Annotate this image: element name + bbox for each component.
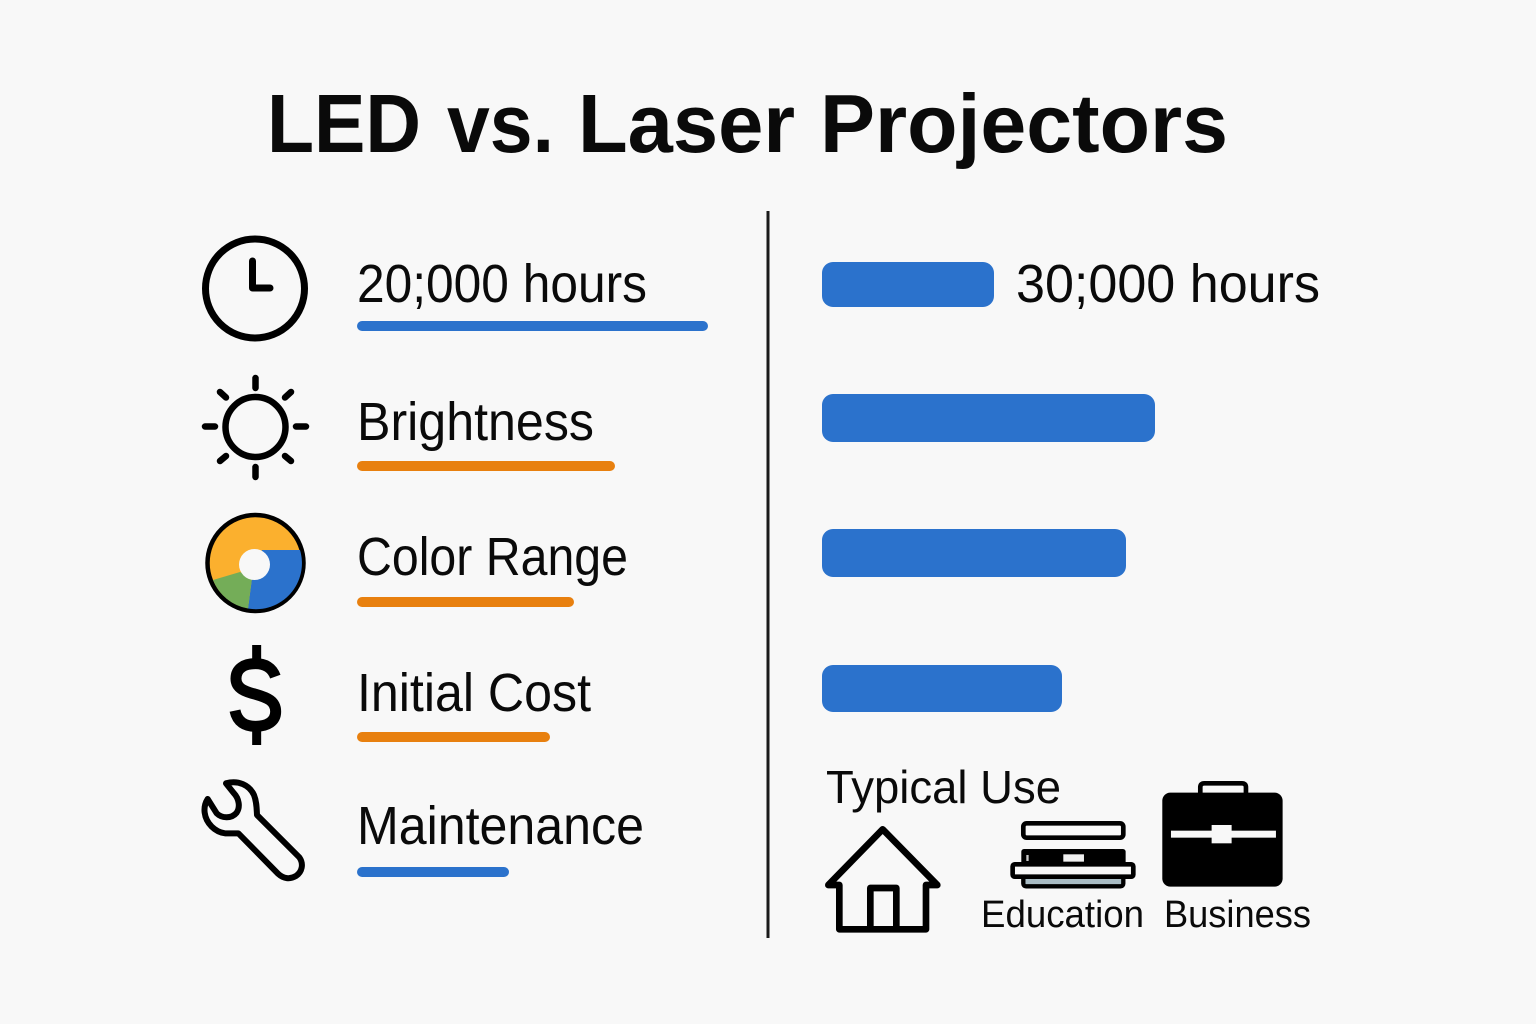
laser lifespan label: 30;000 hours (1016, 254, 1320, 314)
title: Laser (578, 77, 795, 170)
initial cost bar (357, 732, 550, 742)
icon: clock (206, 239, 304, 338)
maintenance label: Maintenance (357, 796, 644, 856)
icon: books (1013, 823, 1133, 886)
LED lifespan label: 20;000 hours (357, 254, 647, 314)
icon: sun (205, 378, 306, 477)
panel: typical use (826, 761, 1311, 936)
brightness bar (357, 461, 615, 471)
divider (766, 211, 770, 938)
laser color range bar (822, 529, 1126, 577)
icon: house (828, 829, 937, 929)
panel: laser column (822, 254, 1320, 712)
education label: Education (981, 894, 1144, 936)
icon: dollar sign (235, 645, 276, 745)
icon: wrench (204, 782, 302, 878)
initial cost label: Initial Cost (357, 663, 591, 723)
color range bar (357, 597, 574, 607)
color range label: Color Range (357, 527, 628, 587)
laser lifespan bar (822, 262, 994, 307)
title: LED (267, 77, 421, 170)
title: vs. (447, 77, 554, 170)
brightness label: Brightness (357, 392, 594, 452)
business label: Business (1164, 894, 1311, 936)
title: Projectors (820, 77, 1228, 170)
LED lifespan bar (357, 321, 708, 331)
panel: LED column (204, 239, 708, 878)
icon: color wheel (208, 515, 304, 611)
maintenance bar (357, 867, 509, 877)
laser initial cost bar (822, 665, 1062, 712)
icon: briefcase (1162, 783, 1283, 887)
typical use heading: Typical Use (826, 761, 1061, 813)
laser brightness bar (822, 394, 1155, 442)
